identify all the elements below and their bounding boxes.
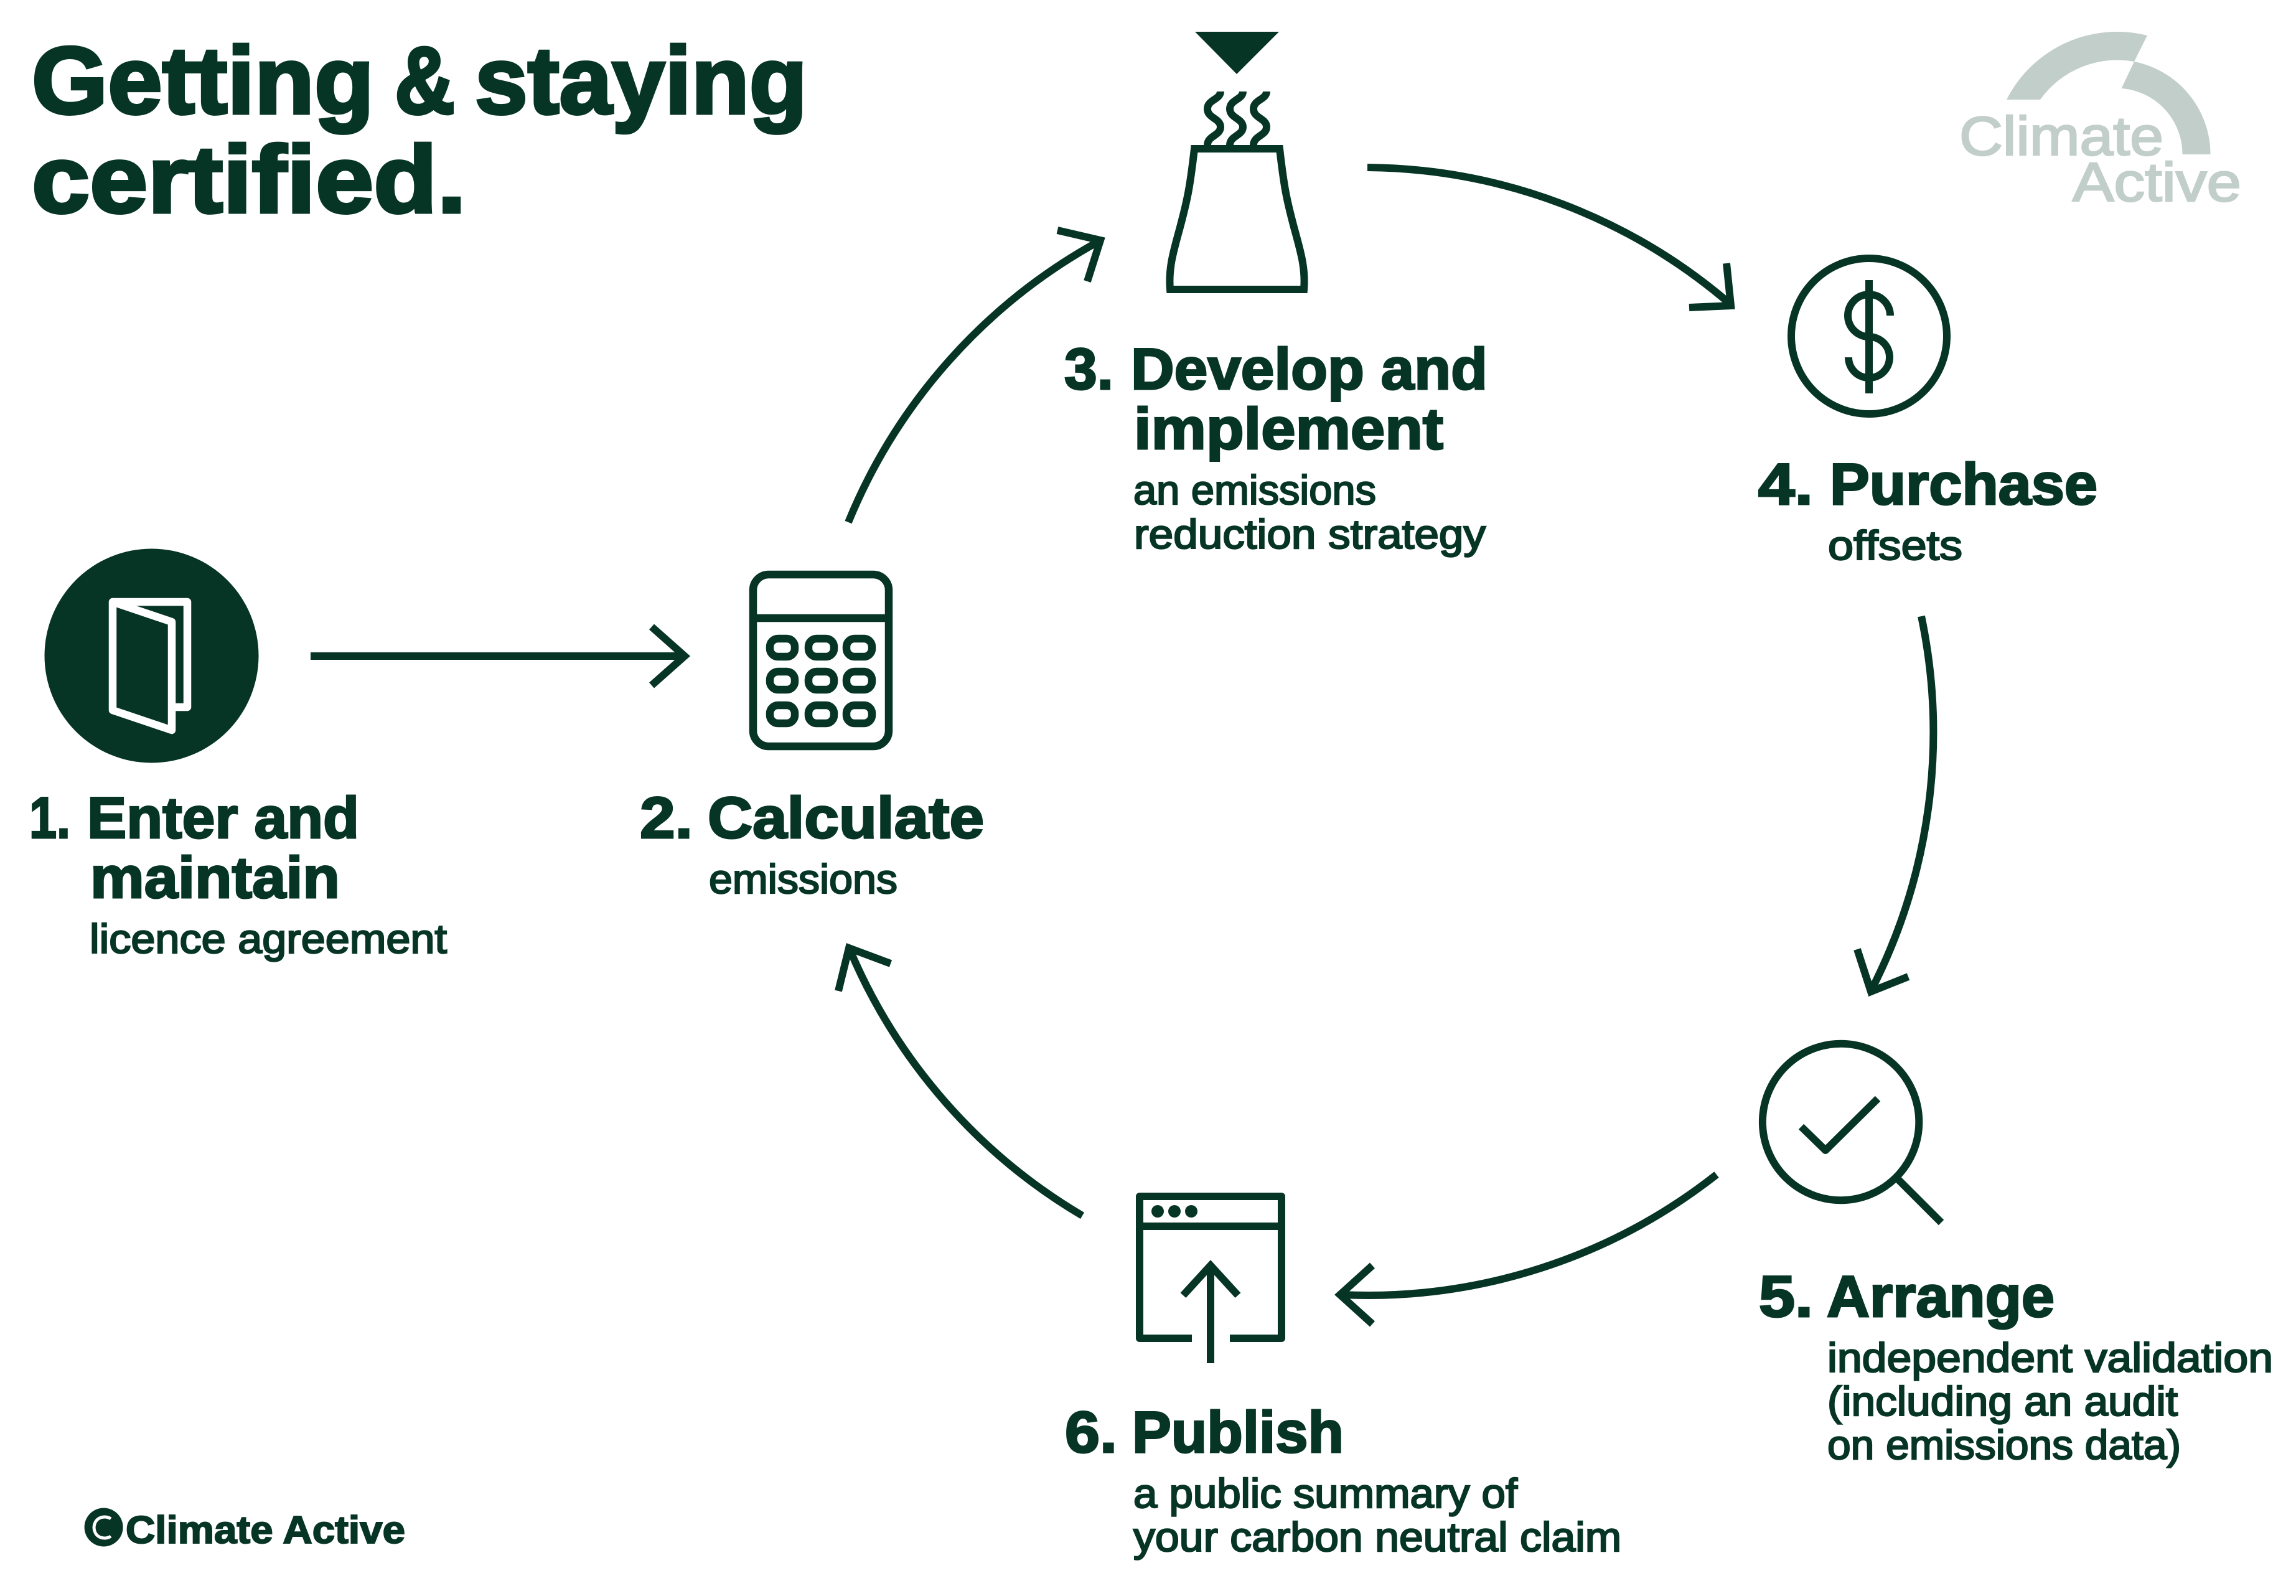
step 2 heading: 2.: [640, 785, 693, 850]
step 5 heading: Arrange: [1827, 1264, 2055, 1329]
step 5 description: independent validation: [1827, 1335, 2273, 1381]
step 1 heading: 1.: [29, 785, 70, 850]
step 6 description: a public summary of: [1133, 1470, 1518, 1516]
step 3 heading: Develop and: [1131, 336, 1488, 401]
step 6 heading: 6.: [1065, 1399, 1117, 1465]
icon: triangle marker: [1195, 32, 1279, 74]
step 5 heading: 5.: [1759, 1264, 1813, 1329]
title: staying: [475, 27, 807, 134]
step 3 heading: implement: [1134, 396, 1443, 461]
arrow: step 5 to step 6: [1340, 1175, 1717, 1324]
icon: magnifier with check mark: [1763, 1044, 1941, 1223]
step 2 description: emissions: [709, 856, 897, 902]
footer logo: Climate Active: Climate Active: [126, 1509, 405, 1552]
step 1 heading: Enter and: [87, 785, 359, 850]
logo: Climate Active watermark: Climate: [1959, 105, 2163, 167]
step 3 description: [1133, 467, 1486, 557]
step 5: arrange independent validation: [1759, 1044, 2273, 1468]
step 1 heading: [29, 785, 359, 910]
step 1: enter and maintain licence agreement: [29, 549, 447, 962]
icon: cooling tower with steam: [1169, 92, 1305, 289]
icon: dollar coin: [1791, 258, 1947, 414]
step 3 heading: 3.: [1064, 336, 1113, 401]
title: Getting: [32, 27, 374, 134]
step 3 heading: [1064, 336, 1488, 461]
step 6 heading: Publish: [1132, 1399, 1344, 1465]
logo: Climate Active watermark: [1959, 32, 2241, 213]
step 4 description: offsets: [1828, 522, 1962, 568]
step 1 description: licence agreement: [90, 916, 447, 962]
step 3: develop and implement an emissions reduction strategy: [1064, 32, 1488, 557]
step 6 description: [1133, 1470, 1621, 1560]
step 6 description: your carbon neutral claim: [1133, 1514, 1621, 1560]
arrow: step 2 to step 3: [848, 230, 1100, 522]
logo: Climate Active watermark: Active: [2073, 151, 2241, 213]
arrow: step 1 to step 2: [311, 627, 685, 685]
step 2 heading: Calculate: [708, 785, 984, 850]
title: &: [395, 27, 455, 134]
step 6: publish a public summary: [1065, 1196, 1621, 1560]
arrow: step 3 to step 4: [1367, 167, 1732, 307]
step 5 description: on emissions data): [1827, 1422, 2181, 1468]
step 5 description: (including an audit: [1827, 1378, 2178, 1424]
step 5 description: [1827, 1335, 2273, 1468]
step 3 description: reduction strategy: [1134, 511, 1486, 557]
title: certified.: [32, 126, 466, 233]
title: [32, 27, 807, 233]
step 4 heading: Purchase: [1830, 451, 2097, 517]
icon: browser window with upload arrow: [1140, 1196, 1282, 1363]
icon: folded document in circle: [45, 549, 259, 763]
step 1 heading: maintain: [90, 845, 340, 910]
arrow: step 4 to step 5: [1857, 616, 1933, 992]
step 4: purchase offsets: [1758, 258, 2097, 568]
step 4 heading: 4.: [1758, 451, 1813, 517]
icon: calculator: [753, 575, 889, 746]
step 2: calculate emissions: [640, 575, 984, 902]
step 3 description: an emissions: [1133, 467, 1376, 513]
arrow: step 6 to step 2: [838, 948, 1082, 1216]
